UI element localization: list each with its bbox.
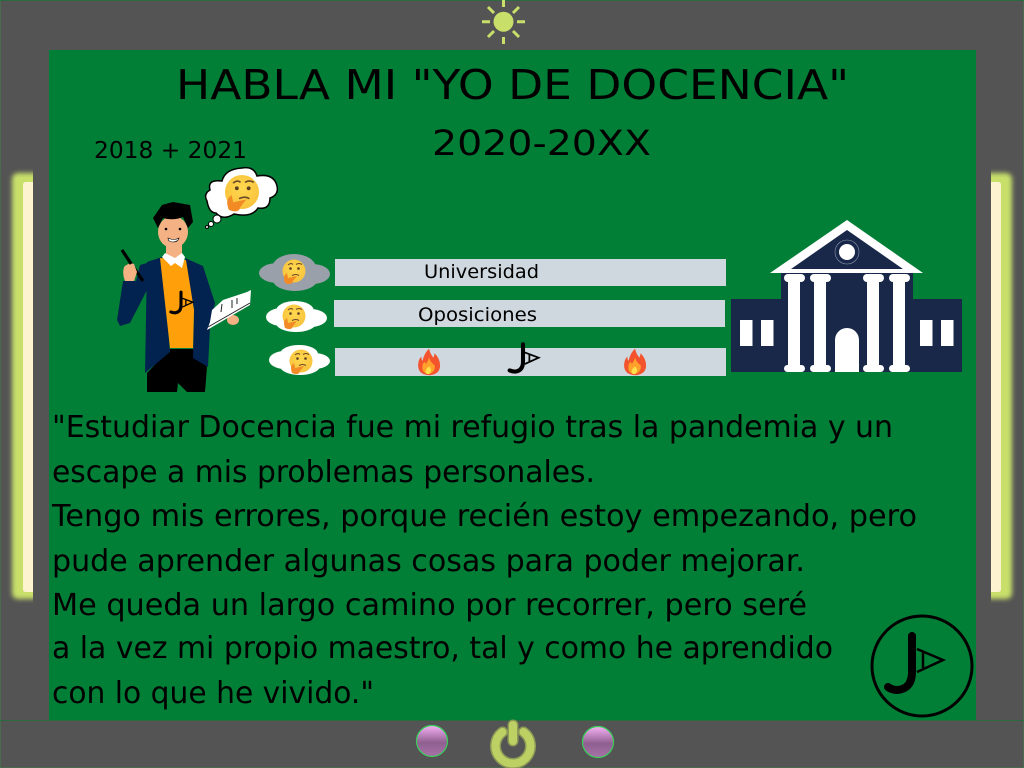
jacket sleeve (117, 263, 147, 326)
side note years: 2018 + 2021 (94, 138, 247, 164)
trousers (147, 349, 207, 392)
book (207, 290, 251, 330)
bar: logo and flames (335, 344, 726, 376)
bar: Oposiciones: Oposiciones (418, 304, 537, 326)
jacket body right (185, 258, 215, 367)
sweater (160, 258, 194, 348)
quote text block: Me queda un largo camino por recorrer, pero seré (52, 588, 807, 623)
icon: power button (496, 725, 530, 764)
shirt logo (171, 292, 193, 313)
quote text block: con lo que he vivido." (52, 676, 374, 711)
quote text block: pude aprender algunas cosas para poder mejorar. (52, 544, 805, 579)
icon: J logo (510, 344, 539, 372)
hand holding book (227, 315, 239, 325)
pen and hand (122, 250, 143, 281)
quote text block (51, 410, 917, 711)
quote text block: Tengo mis errores, porque recién estoy empezando, pero (51, 499, 917, 534)
left neon light (8, 170, 33, 602)
bar: Oposiciones (334, 300, 725, 327)
green screen panel (49, 50, 976, 720)
jacket body left (145, 257, 170, 373)
bar: Universidad: Universidad (424, 261, 539, 283)
white thought cloud (266, 301, 327, 332)
white thought cloud (269, 345, 330, 375)
icon: university building (731, 220, 962, 372)
title: HABLA MI "YO DE DOCENCIA" (176, 61, 849, 109)
subtitle years: 2020-20XX (432, 124, 651, 164)
bar: Universidad (335, 259, 726, 286)
collar (162, 253, 185, 268)
icon: circular J logo (872, 616, 972, 716)
neck and head (166, 240, 182, 258)
icon: flame left (418, 349, 440, 375)
right neon light (991, 170, 1016, 602)
quote text block: escape a mis problemas personales. (52, 455, 595, 490)
indicator: left purple orb (416, 726, 448, 756)
large thought bubble (206, 168, 277, 228)
icon: sun (482, 0, 525, 44)
icon: flame right (624, 349, 646, 375)
quote text block: a la vez mi propio maestro, tal y como he aprendido (52, 631, 833, 666)
grey thought cloud (259, 254, 330, 291)
illustration: teacher (117, 202, 251, 392)
quote text block: "Estudiar Docencia fue mi refugio tras la pandemia y un (52, 410, 893, 445)
indicator: right purple orb (582, 726, 614, 758)
